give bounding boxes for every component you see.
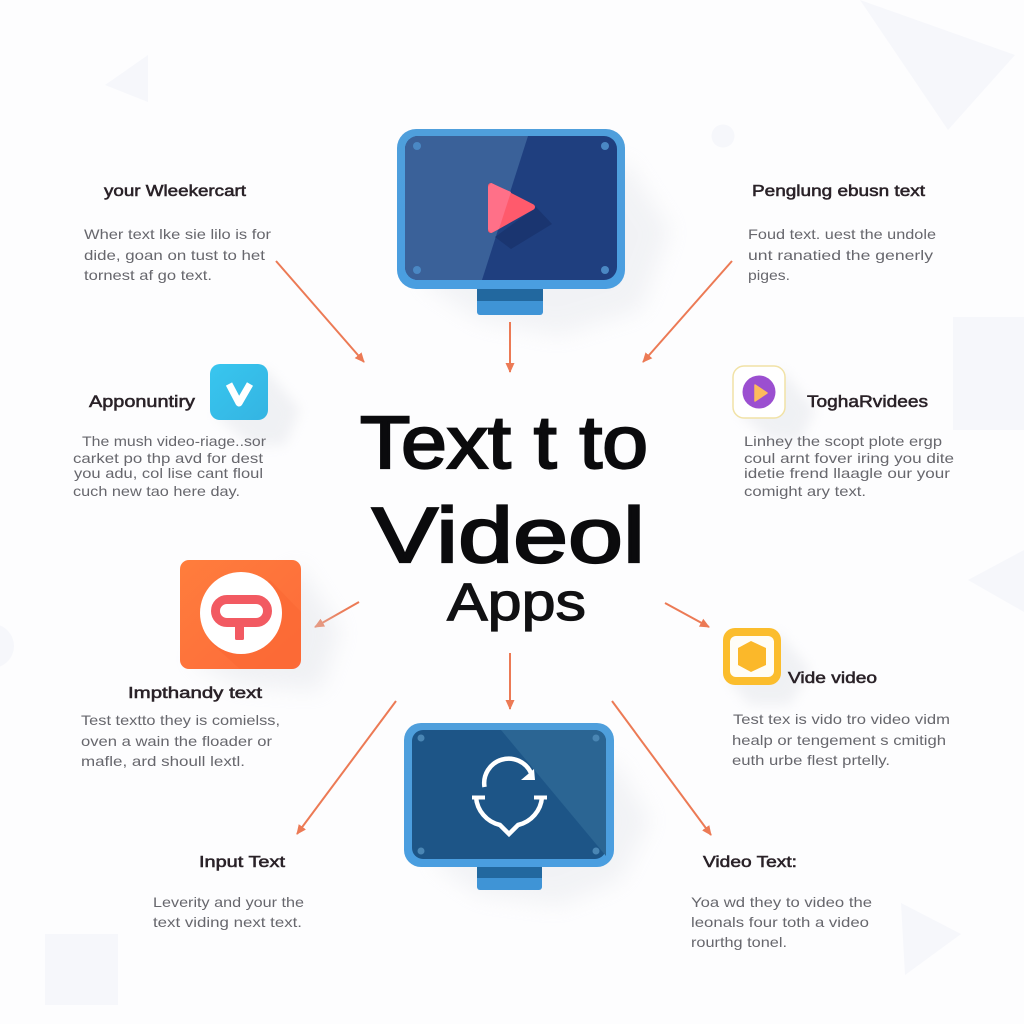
text block: top right: Foud text. uest the undole — [748, 226, 936, 242]
text block: ToghaRvidees: ToghaRvidees — [807, 392, 928, 411]
text block: Apponuntiry — [73, 392, 266, 499]
text block: Input Text: Leverity and your the — [153, 894, 304, 910]
text block: Apponuntiry: The mush video-riage..sor — [82, 433, 266, 449]
icon: cyan V app — [210, 364, 300, 445]
title: Text t to — [360, 401, 648, 484]
text block: Video Text: leonals four toth a video — [691, 914, 869, 930]
text block: top left: your Wleekercart — [104, 183, 247, 200]
icon: purple play app — [733, 366, 815, 442]
text block: top right — [748, 183, 936, 283]
text block: Apponuntiry: carket po thp avd for dest — [73, 450, 263, 466]
text block: ToghaRvidees: idetie frend llaagle our your — [744, 465, 950, 481]
text block: Apponuntiry: cuch new tao here day. — [73, 483, 240, 499]
text block: Video Text — [691, 854, 872, 950]
text block: Video Text: Yoa wd they to video the — [691, 894, 872, 910]
text block: top left: Wher text lke sie lilo is for — [84, 226, 271, 242]
text block: Impthandy text — [81, 685, 280, 769]
text block: ToghaRvidees — [744, 392, 954, 499]
text block: top left: dide, goan on tust to het — [84, 247, 265, 263]
icon: yellow hexagon app — [723, 628, 810, 705]
text block: Apponuntiry: you adu, col lise cant floul — [74, 465, 263, 481]
text block: Impthandy text: Test textto they is comielss, — [81, 712, 280, 728]
text block: Vide video — [732, 670, 950, 768]
text block: Vide video: Vide video — [788, 670, 877, 687]
text block: Input Text: Input Text — [199, 854, 286, 871]
icon: top monitor with play button — [397, 129, 670, 335]
text block: Vide video: euth urbe flest prtelly. — [732, 752, 890, 768]
text block: Vide video: Test tex is vido tro video vidm — [733, 711, 950, 727]
icon: bottom monitor with refresh symbol — [404, 723, 650, 905]
text block: top right: unt ranatied the generly — [748, 247, 933, 263]
text block: top left — [84, 183, 271, 283]
text block: Impthandy text: Impthandy text — [128, 685, 263, 702]
title — [360, 401, 648, 632]
text block: ToghaRvidees: comight ary text. — [744, 483, 866, 499]
text block: top right: piges. — [748, 267, 790, 283]
text block: Input Text: text viding next text. — [153, 914, 302, 930]
title: Apps — [447, 573, 586, 632]
text block: ToghaRvidees: coul arnt fover iring you dite — [744, 450, 954, 466]
text block: Vide video: healp or tengement s cmitigh — [732, 732, 946, 748]
text block: Apponuntiry: Apponuntiry — [89, 392, 196, 411]
text block: Impthandy text: mafle, ard shoull lextl. — [81, 753, 245, 769]
text block: top right: Penglung ebusn text — [752, 183, 926, 200]
icon: orange chat app — [180, 560, 340, 690]
text block: Video Text: rourthg tonel. — [691, 934, 787, 950]
text block: Video Text: Video Text: — [703, 854, 797, 871]
text block: Impthandy text: oven a wain the floader or — [81, 733, 272, 749]
text block: top left: tornest af go text. — [84, 267, 212, 283]
title: Videol — [372, 491, 645, 579]
text block: Input Text — [153, 854, 304, 930]
text block: ToghaRvidees: Linhey the scopt plote ergp — [744, 433, 942, 449]
arrows — [276, 261, 732, 835]
